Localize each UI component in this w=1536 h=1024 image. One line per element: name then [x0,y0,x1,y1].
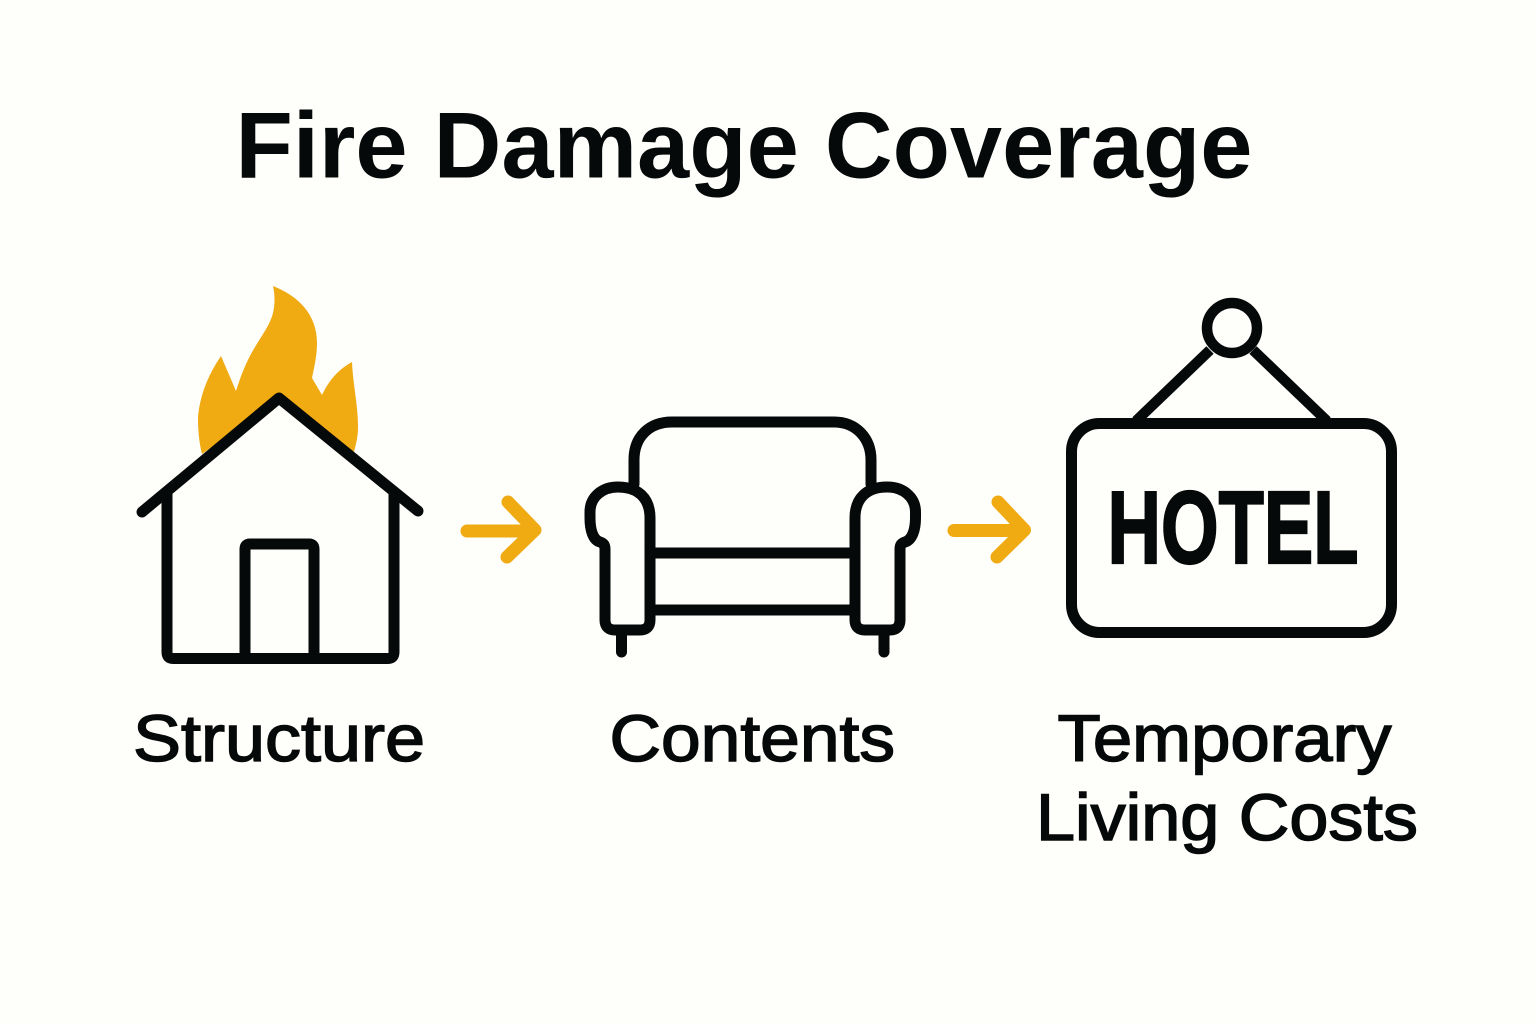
label: temporary living costs: Temporary [1058,701,1392,775]
icon: burning house [142,286,418,658]
arrow: structure to contents [467,502,535,557]
title: Fire Damage Coverage [236,92,1252,198]
label: temporary living costs [1036,701,1418,854]
icon: hotel sign [1072,303,1392,632]
icon: flame [198,286,358,454]
label: structure: Structure [133,701,425,775]
label: temporary living costs: Living Costs [1036,780,1418,854]
icon: armchair [590,422,916,652]
arrow: contents to hotel [954,502,1024,557]
label: contents: Contents [610,701,895,775]
icon: hotel sign: HOTEL [1108,470,1358,585]
